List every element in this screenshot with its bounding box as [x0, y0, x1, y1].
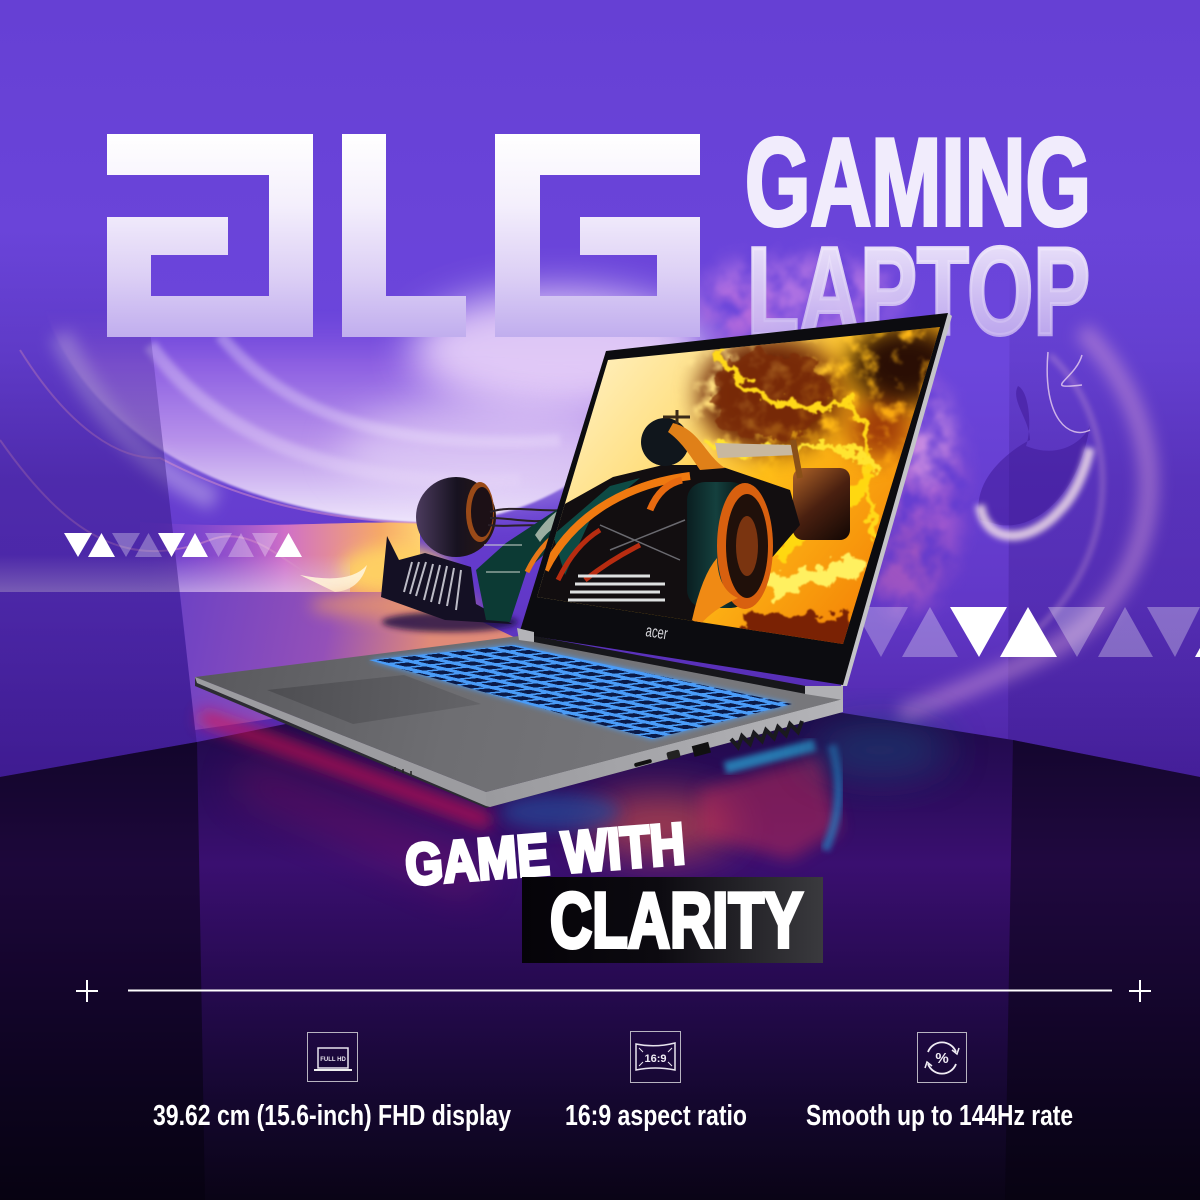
- tagline: GAME WITH: GAME WITH: [403, 811, 687, 898]
- icon: refresh rate: [918, 1032, 966, 1082]
- icon: full HD laptop: FULL HD: [320, 1057, 346, 1063]
- triangle row right: [853, 607, 1200, 657]
- acer logo: acer: [644, 621, 669, 643]
- background light arcs and horizon glow: [0, 290, 710, 730]
- triangle row left: [64, 533, 302, 557]
- touchpad: [267, 675, 481, 724]
- fire and smoke: [698, 325, 960, 660]
- icon: refresh rate: %: [935, 1050, 949, 1067]
- laptop base: [195, 636, 843, 808]
- backlit keyboard: [369, 645, 792, 739]
- race car emerging from screen: [381, 477, 575, 632]
- dark reflective floor: [0, 700, 1200, 1200]
- icon: full HD laptop: [308, 1032, 358, 1082]
- laptop lid: [517, 313, 952, 700]
- feature text: aspect ratio: 16:9 aspect ratio: [565, 1100, 747, 1132]
- logo: ALG: [107, 134, 700, 337]
- feature text: refresh rate: Smooth up to 144Hz rate: [806, 1100, 1073, 1132]
- side ports and vents: [395, 721, 802, 775]
- icon: 16:9 aspect: [630, 1032, 680, 1082]
- side panel shading: [0, 200, 1200, 780]
- on-screen race car: [530, 410, 850, 625]
- divider with plus marks: [76, 980, 1151, 1002]
- nebula behind laptop: [700, 257, 960, 610]
- swirl shapes on the right: [900, 330, 1149, 715]
- feature text: display: 39.62 cm (15.6-inch) FHD display: [153, 1100, 511, 1132]
- icon: 16:9 aspect: 16:9: [644, 1053, 667, 1065]
- tagline box: CLARITY: CLARITY: [550, 876, 803, 964]
- laptop: [195, 313, 960, 808]
- laptop screen artwork: [537, 327, 940, 644]
